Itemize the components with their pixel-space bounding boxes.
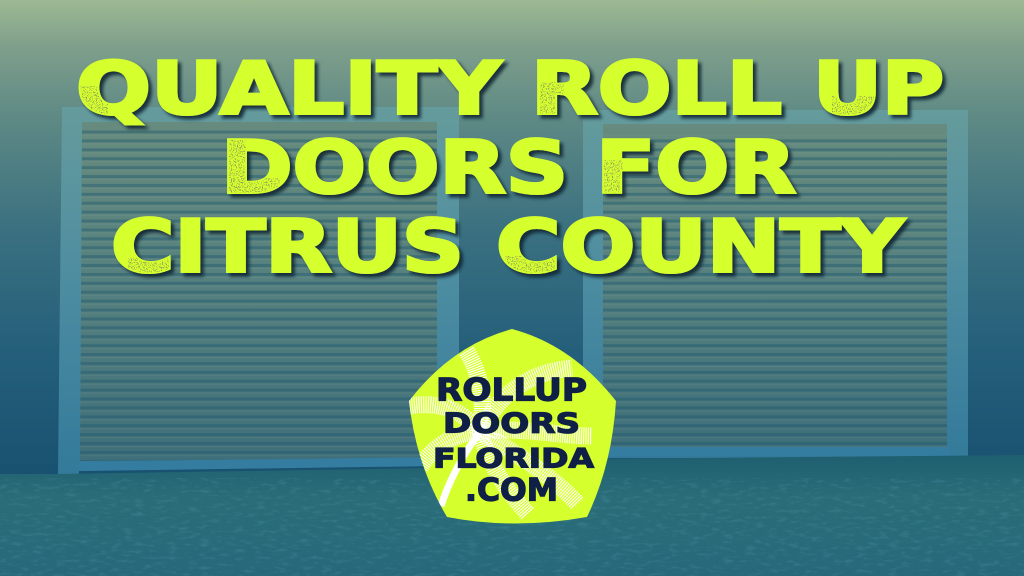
logo badge — [408, 329, 616, 524]
logo wordmark — [433, 372, 594, 508]
title — [76, 46, 944, 288]
right door frame — [583, 110, 968, 458]
logo wordmark: .COM — [465, 472, 558, 508]
left door slats — [80, 122, 437, 461]
left door frame — [58, 107, 459, 474]
left door bottom sill — [79, 457, 440, 471]
logo wordmark: ROLLUP — [436, 372, 587, 408]
left roll-up door — [58, 107, 459, 474]
title distressed texture — [78, 82, 880, 275]
icon: palm tree — [408, 350, 592, 514]
right door bottom sill — [603, 447, 950, 456]
ground: grass — [0, 455, 1024, 576]
logo wordmark: FLORIDA — [433, 444, 594, 474]
badge shape — [409, 329, 616, 524]
right roll-up door — [583, 110, 968, 458]
logo wordmark: DOORS — [443, 406, 580, 440]
right door slats — [603, 124, 947, 447]
